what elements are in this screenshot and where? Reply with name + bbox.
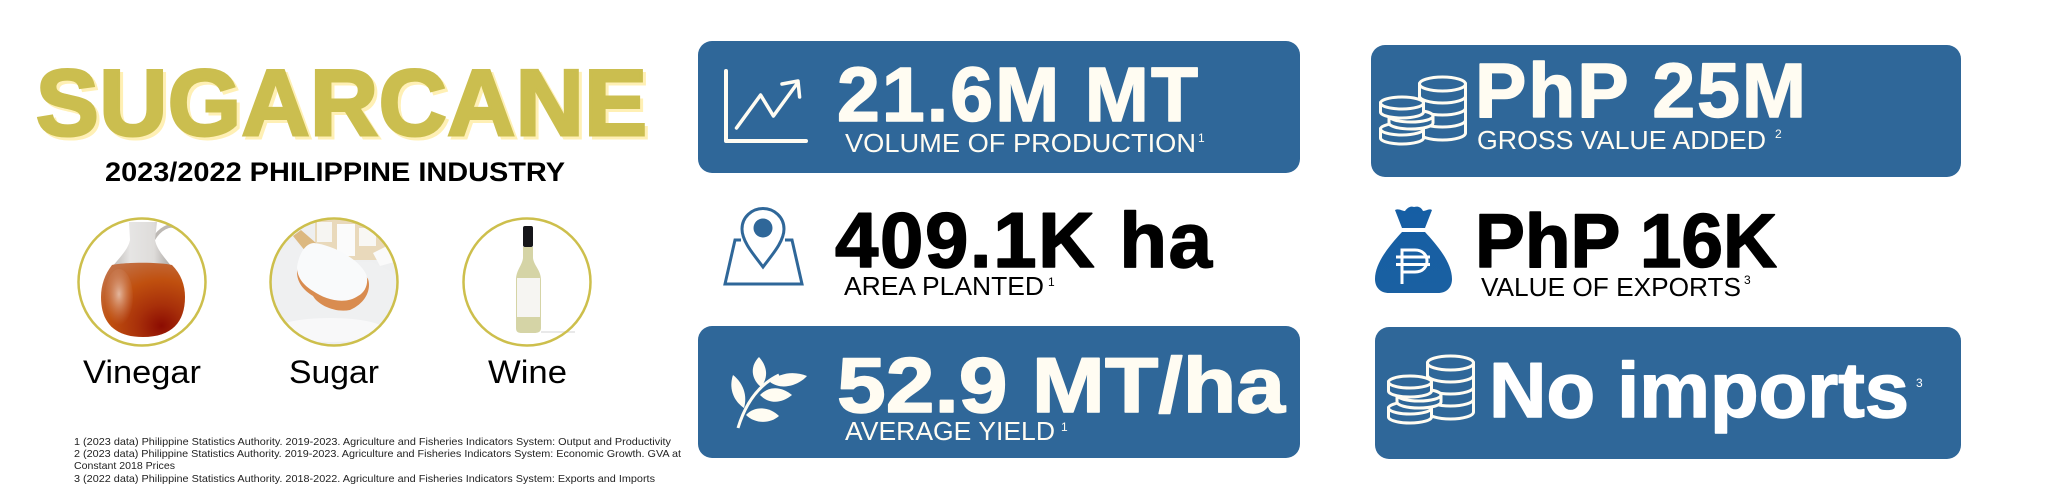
sugar label: Sugar xyxy=(289,354,379,390)
footnotes xyxy=(74,436,681,485)
panel: area planted xyxy=(725,196,1213,301)
subtitle: 2023/2022 PHILIPPINE INDUSTRY xyxy=(105,157,565,187)
value: PhP 25M xyxy=(1475,48,1806,134)
panel: value of exports xyxy=(1375,199,1777,302)
icon: map pin xyxy=(725,208,802,284)
title: SUGARCANE: SUGARCANE xyxy=(39,53,650,158)
value: 409.1K ha xyxy=(835,196,1213,284)
icon: leaf sprig xyxy=(731,357,807,428)
footnote mark: 1 xyxy=(1198,131,1205,145)
icon: coins xyxy=(1380,77,1466,144)
footnote mark: 3 xyxy=(1744,273,1751,287)
vinegar ring xyxy=(78,218,206,346)
wine label: Wine xyxy=(488,354,567,390)
sugar image xyxy=(270,218,398,346)
panel: gross value added xyxy=(1371,45,1961,177)
footnotes: 1 (2023 data) Philippine Statistics Authority. 2019-2023. Agriculture and Fisheries Indicators System: Output and Productivity xyxy=(74,436,672,448)
footnotes: 2 (2023 data) Philippine Statistics Authority. 2019-2023. Agriculture and Fisheries Indicators System: Economic Growth. GVA at xyxy=(74,448,681,460)
value: No imports xyxy=(1489,346,1909,434)
footnote mark: 1 xyxy=(1061,420,1068,434)
value: 52.9 MT/ha xyxy=(837,341,1286,429)
footnote mark: 1 xyxy=(1048,275,1055,289)
caption: AREA PLANTED xyxy=(844,271,1044,301)
value: PhP 16K xyxy=(1475,199,1777,284)
caption: VOLUME OF PRODUCTION xyxy=(845,128,1196,158)
wine ring xyxy=(464,218,590,346)
vinegar image xyxy=(101,222,185,337)
caption: GROSS VALUE ADDED xyxy=(1477,125,1766,155)
footnotes: 3 (2022 data) Philippine Statistics Authority. 2018-2022. Agriculture and Fisheries Indicators System: Exports and Imports xyxy=(74,473,655,485)
icon: coins xyxy=(1388,356,1474,423)
value: 21.6M MT xyxy=(837,52,1198,138)
footnote mark: 2 xyxy=(1775,127,1782,141)
title: SUGARCANE: SUGARCANE xyxy=(36,50,647,155)
panel: imports xyxy=(1375,327,1961,459)
caption: AVERAGE YIELD xyxy=(845,416,1055,446)
product: sugar xyxy=(270,218,398,390)
footnote mark: 3 xyxy=(1916,376,1923,390)
vinegar label: Vinegar xyxy=(83,354,201,390)
wine bottle xyxy=(516,226,575,333)
sugar ring xyxy=(270,218,398,346)
icon: money bag xyxy=(1375,207,1452,293)
icon: line chart xyxy=(726,71,806,141)
panel: average yield xyxy=(698,326,1300,458)
footnotes: Constant 2018 Prices xyxy=(74,460,175,472)
panel: volume of production xyxy=(698,41,1300,173)
caption: VALUE OF EXPORTS xyxy=(1481,272,1741,302)
product: vinegar xyxy=(78,218,206,390)
product: wine xyxy=(464,218,590,390)
